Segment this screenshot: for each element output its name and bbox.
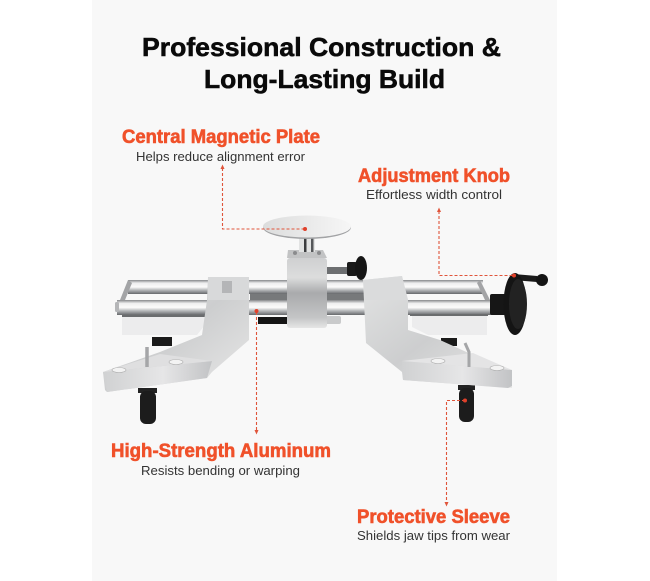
arrow: sleeve leader xyxy=(444,398,467,506)
right jaw xyxy=(363,276,512,388)
title: Long-Lasting Build xyxy=(204,64,445,94)
callout: protective sleeve: Shields jaw tips from wear xyxy=(357,528,511,543)
central block xyxy=(287,250,327,328)
rail carriers xyxy=(122,314,488,346)
central magnetic plate xyxy=(263,216,351,239)
small knob xyxy=(347,256,367,280)
arrow: plate leader xyxy=(220,164,307,231)
right bolt xyxy=(458,385,475,422)
title xyxy=(142,32,501,94)
callout: protective sleeve xyxy=(357,398,511,543)
post xyxy=(296,234,316,252)
hand knob xyxy=(490,273,548,335)
left bolt xyxy=(138,388,157,424)
arrow: aluminum leader xyxy=(254,309,258,434)
callout: adjustment knob: Effortless width control xyxy=(366,187,502,202)
title: Professional Construction & xyxy=(142,32,501,62)
lead screw xyxy=(258,267,352,324)
callout: high-strength aluminum: High-Strength Aluminum xyxy=(111,441,331,462)
callout: protective sleeve: Protective Sleeve xyxy=(357,507,510,528)
left jaw xyxy=(103,277,249,392)
callout: central magnetic plate: Helps reduce alignment error xyxy=(136,149,306,164)
arrow: knob leader xyxy=(437,208,516,278)
product: alignment clamp xyxy=(103,216,548,424)
callout: adjustment knob xyxy=(358,166,516,278)
panel: background xyxy=(92,0,557,581)
callout: central magnetic plate xyxy=(122,127,320,231)
callout: high-strength aluminum: Resists bending or warping xyxy=(141,463,300,478)
callout: central magnetic plate: Central Magnetic Plate xyxy=(122,127,320,148)
rails xyxy=(115,280,495,315)
callout: adjustment knob: Adjustment Knob xyxy=(358,166,510,187)
callout: high-strength aluminum xyxy=(111,309,331,478)
